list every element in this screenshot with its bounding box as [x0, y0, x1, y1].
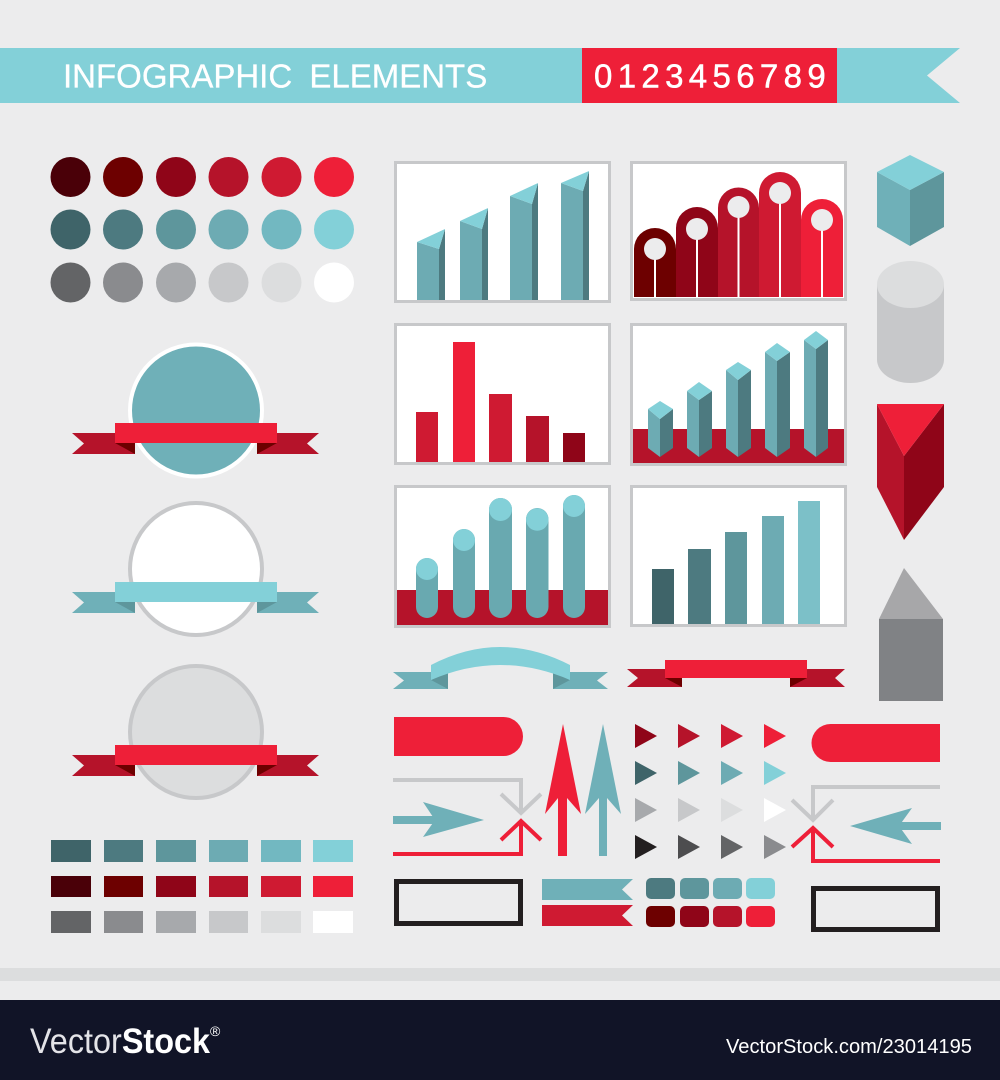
- triangle bullets: [635, 724, 786, 859]
- flag: red: [542, 905, 633, 926]
- ribbon: arched teal: [393, 647, 608, 689]
- chart: teal cylinders on red band: [396, 486, 610, 626]
- badge: white circle with teal ribbon: [72, 503, 319, 635]
- empty black frame right: [814, 888, 938, 930]
- empty black frame left: [396, 882, 520, 924]
- arrows: right group: [792, 787, 941, 861]
- chart: isometric teal columns on red band: [632, 324, 846, 464]
- image id: VectorStock.com/23014195: [726, 1036, 972, 1058]
- rounded colour tiles: [646, 878, 775, 927]
- icon: teal cube: [877, 155, 944, 246]
- logo: VectorStock: [30, 1022, 210, 1061]
- chart: red bars: [396, 324, 610, 464]
- icon: grey house shape: [879, 568, 943, 701]
- registered mark: ®: [210, 1023, 221, 1039]
- ribbon: flat red: [627, 660, 845, 687]
- icon: grey cylinder: [877, 261, 944, 383]
- chart: teal gradient bars: [632, 486, 846, 626]
- button: red pill right: [812, 724, 940, 762]
- button: red pill left: [394, 717, 523, 756]
- colour dots palette: [50, 157, 354, 302]
- chart: red pin columns: [632, 162, 846, 300]
- chart: wedge-top teal bars: [396, 162, 610, 302]
- colour swatches palette: [51, 840, 353, 933]
- arrows: left group: [393, 780, 541, 854]
- arrow: tall teal up: [585, 724, 621, 856]
- title: INFOGRAPHIC ELEMENTS: [63, 58, 487, 94]
- badge: teal circle with red ribbon: [72, 344, 319, 476]
- icon: red prism pointing down: [877, 404, 944, 540]
- arrow: tall red up: [545, 724, 581, 856]
- title banner: [0, 48, 960, 103]
- footer bar: [0, 1000, 1000, 1080]
- flag: teal: [542, 879, 633, 900]
- numbers: 0123456789: [594, 58, 831, 94]
- badge: grey circle with red ribbon: [72, 666, 319, 798]
